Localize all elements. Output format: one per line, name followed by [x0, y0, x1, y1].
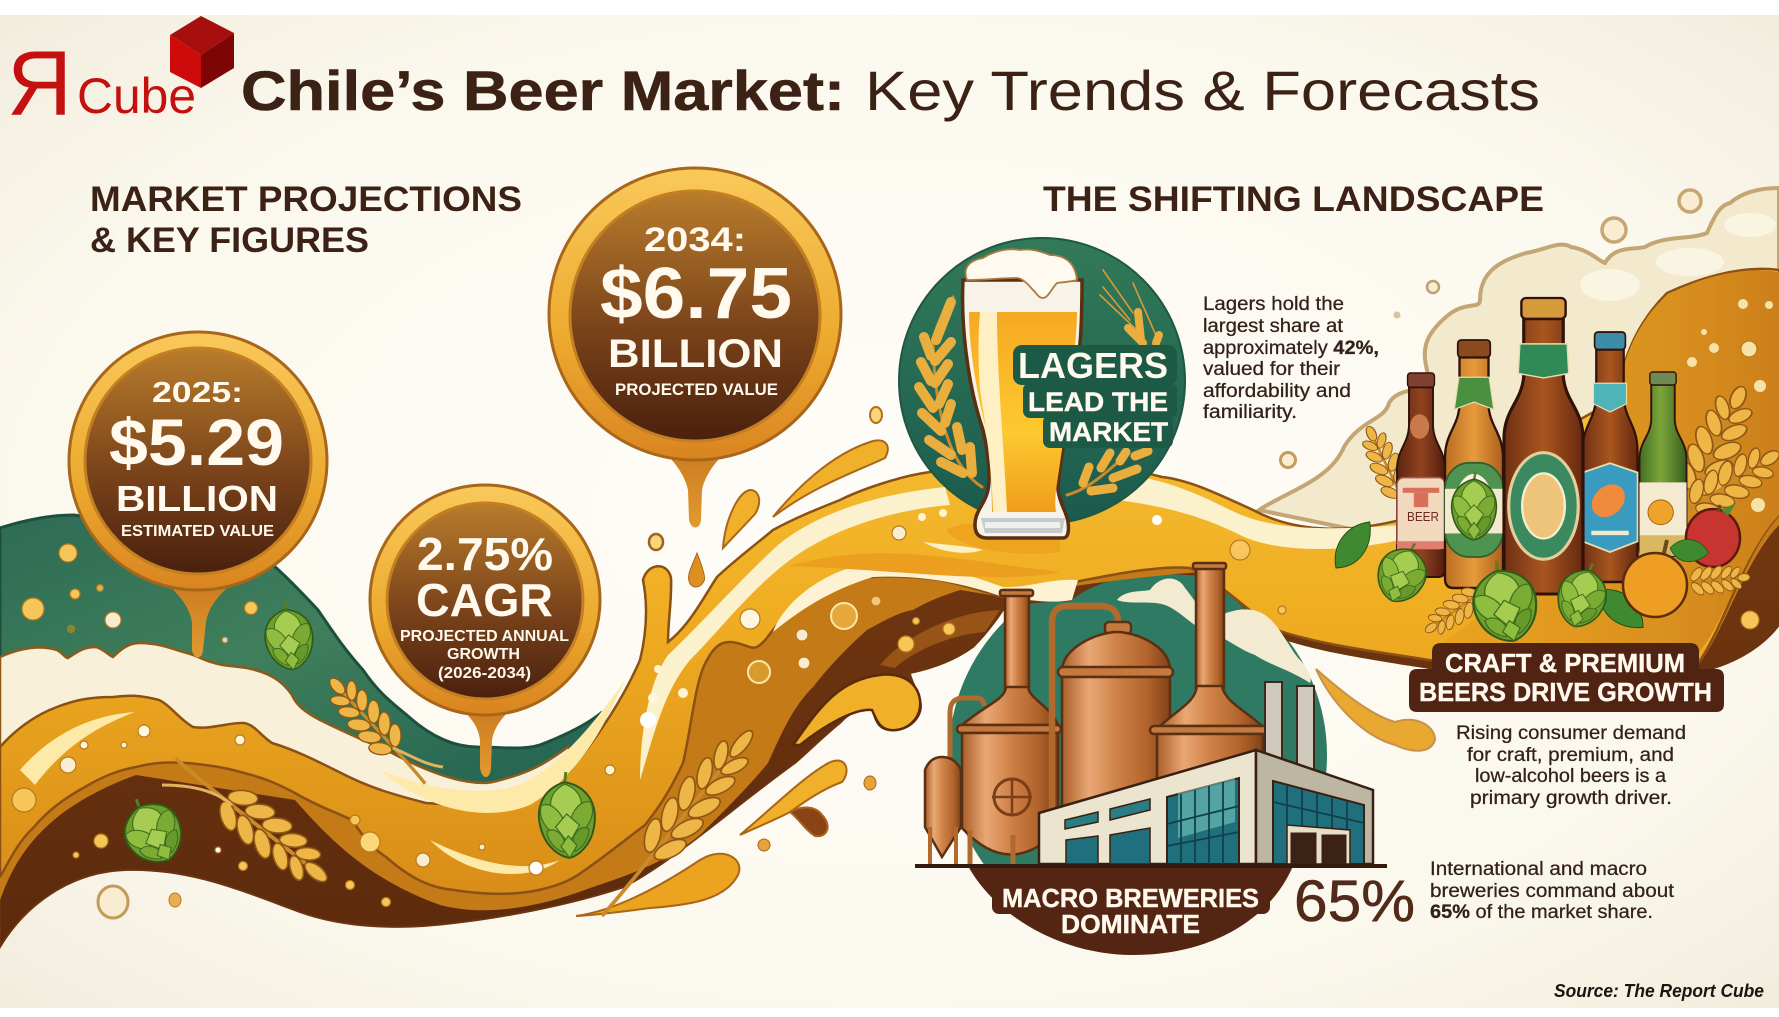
hops and wheat on waves — [110, 598, 771, 932]
panel: brewery illustration — [915, 563, 1387, 955]
bubble: CAGR: CAGR — [416, 574, 553, 626]
tall central tank — [1052, 606, 1173, 847]
lagers description: Lagers hold the — [1203, 294, 1344, 315]
lagers label: LEAD THE — [1028, 387, 1168, 417]
amber beer panel on right — [1440, 270, 1779, 652]
main beer wave: bright gold layer — [0, 269, 1779, 894]
heading: the shifting landscape: THE SHIFTING LANDSCAPE — [1043, 180, 1544, 219]
lagers green circle — [899, 238, 1185, 524]
factory building — [1039, 750, 1373, 864]
bubble: 2025 estimated value: $5.29 — [109, 405, 284, 479]
macro breweries base and banner: MACRO BREWERIES — [1002, 883, 1259, 913]
bottle 2 hop — [1452, 471, 1496, 540]
craft description: primary growth driver. — [1470, 788, 1672, 809]
bubble: 2025 estimated value: BILLION — [116, 478, 278, 519]
craft and premium banner: BEERS DRIVE GROWTH — [1419, 677, 1712, 707]
cube icon — [170, 16, 234, 88]
lagers description: familiarity. — [1203, 402, 1297, 423]
panel: craft bottles — [1325, 298, 1779, 648]
logo: report cube — [7, 16, 234, 135]
lagers description: approximately 42%, — [1203, 338, 1379, 359]
craft and premium banner — [1409, 643, 1724, 712]
bubble: CAGR: (2026-2034) — [438, 665, 531, 682]
logo: report cube: Я — [7, 33, 72, 135]
title — [241, 59, 1540, 122]
bubble: CAGR: GROWTH — [447, 646, 520, 663]
bubble: 2034 projected value: 2034: — [644, 221, 746, 259]
craft description — [1456, 723, 1686, 809]
hops, orange and leaves foreground — [1325, 515, 1751, 648]
panel: lagers lead the market — [899, 238, 1185, 538]
65 percent figure: 65% — [1294, 869, 1415, 934]
dark band in amber — [880, 610, 1000, 668]
bottle 5 — [1640, 372, 1686, 556]
wheat sprigs around glass — [919, 270, 1159, 495]
craft description: for craft, premium, and — [1467, 745, 1674, 766]
title: Chile’s Beer Market: — [241, 59, 845, 122]
source note: Source: The Report Cube — [1554, 981, 1764, 1001]
lagers label: MARKET — [1049, 417, 1169, 447]
beer splashes — [576, 440, 1435, 916]
wave highlights — [20, 472, 1400, 874]
bubble: CAGR — [370, 485, 600, 777]
main beer wave: brown layer — [0, 269, 1779, 947]
lagers description: valued for their — [1203, 359, 1341, 380]
bottle 2 — [1445, 340, 1503, 588]
bubble: 2025 estimated value: 2025: — [152, 377, 243, 409]
lagers label — [1013, 345, 1177, 448]
bubble: CAGR: PROJECTED ANNUAL — [400, 628, 569, 645]
bubble: 2034 projected value — [549, 168, 841, 528]
craft description: low-alcohol beers is a — [1475, 766, 1666, 787]
lagers label: LAGERS — [1018, 345, 1168, 386]
bubble: CAGR: 2.75% — [417, 528, 553, 580]
lagers description: largest share at — [1203, 316, 1344, 337]
bubble: 2025 estimated value: ESTIMATED VALUE — [121, 523, 274, 540]
apple — [1686, 503, 1740, 567]
heading: market projections: & KEY FIGURES — [90, 221, 369, 260]
steam — [1117, 578, 1311, 683]
macro description — [1430, 859, 1675, 923]
logo: report cube: Cube — [77, 68, 196, 124]
foam cloud behind bottles — [1259, 188, 1779, 560]
lagers description: affordability and — [1203, 381, 1351, 402]
free bubbles and droplets — [98, 190, 1701, 918]
foam wave — [0, 643, 620, 830]
wheat behind bottles — [1351, 375, 1779, 555]
gold curl — [793, 675, 920, 745]
bubble: 2034 projected value: $6.75 — [600, 254, 792, 334]
copper kettle — [957, 590, 1061, 865]
copper kettle with tall neck — [1150, 563, 1268, 834]
beer glass — [963, 249, 1082, 538]
title: Key Trends & Forecasts — [865, 59, 1540, 122]
chimneys — [1265, 682, 1314, 781]
green wave — [0, 515, 640, 790]
bottle 4 — [1582, 332, 1638, 582]
bubble: 2025 estimated value — [69, 332, 327, 658]
macro description: 65% of the market share. — [1430, 902, 1653, 923]
macro description: International and macro — [1430, 859, 1647, 880]
lagers description — [1203, 294, 1379, 423]
heading: market projections — [90, 180, 522, 260]
bottle 3 — [1504, 298, 1583, 594]
bubble: 2034 projected value: PROJECTED VALUE — [615, 381, 778, 399]
bottle 1 label text: BEER — [1407, 509, 1439, 524]
bubble: 2034 projected value: BILLION — [608, 332, 783, 376]
bottle 1 — [1397, 373, 1445, 577]
macro breweries base and banner: DOMINATE — [1061, 909, 1200, 939]
green circle behind brewery — [949, 566, 1327, 944]
heading: market projections: MARKET PROJECTIONS — [90, 180, 522, 219]
small tank — [925, 698, 984, 865]
bubbles on waves — [12, 299, 1773, 906]
macro description: breweries command about — [1430, 881, 1675, 902]
main beer wave: mid amber layer — [0, 400, 1779, 910]
craft and premium banner: CRAFT & PREMIUM — [1445, 648, 1685, 678]
craft description: Rising consumer demand — [1456, 723, 1686, 744]
macro breweries base and banner — [915, 864, 1387, 955]
